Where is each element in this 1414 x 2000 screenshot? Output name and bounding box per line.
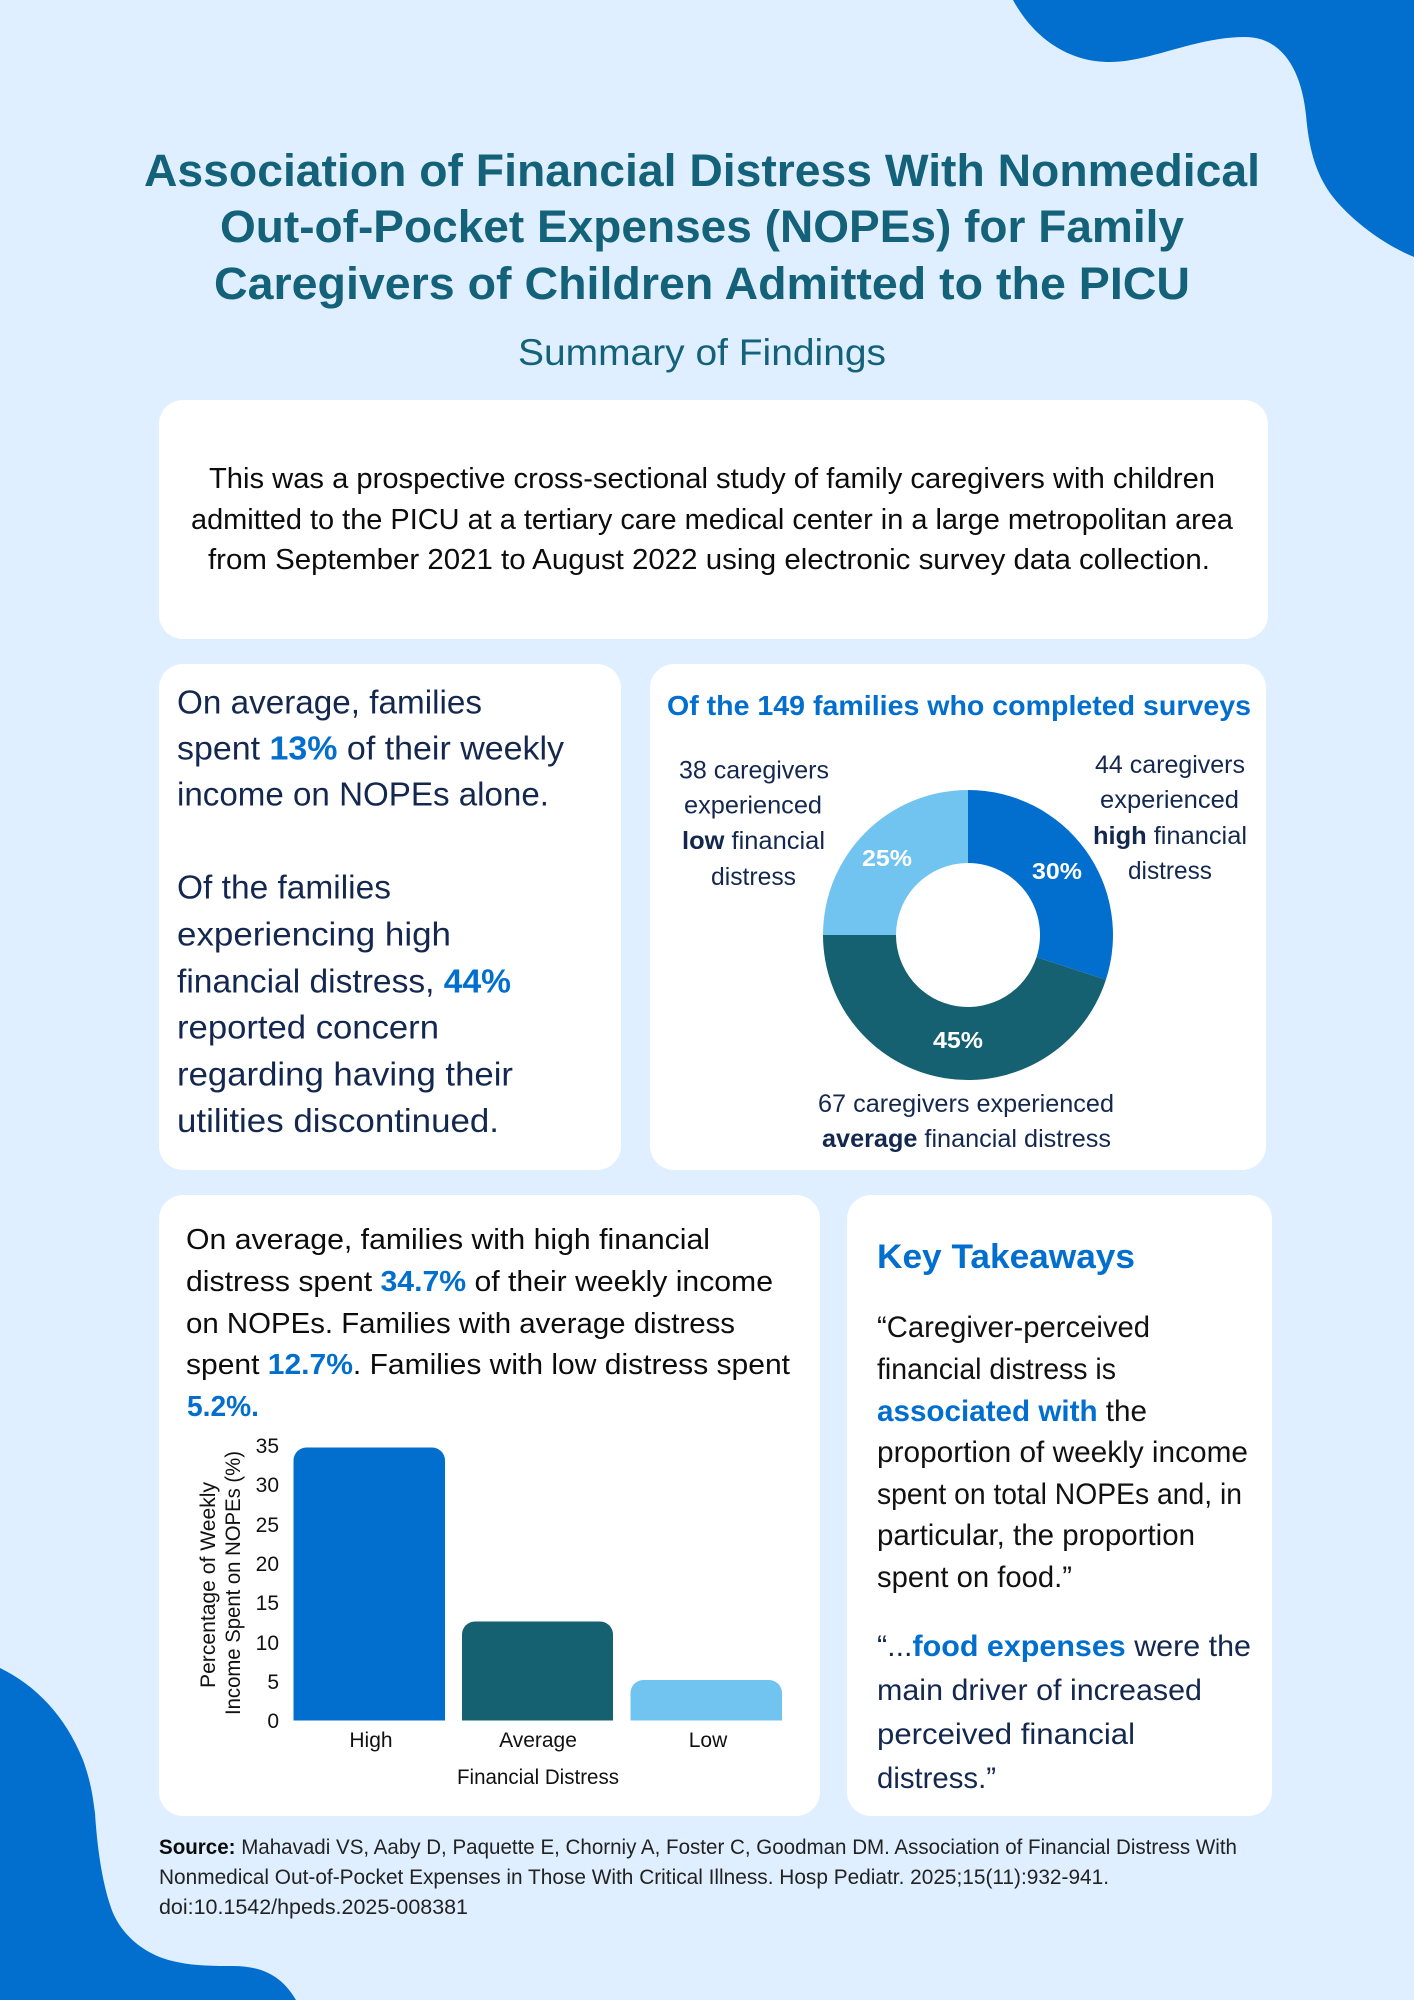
- bar: average 12.7: [462, 1622, 613, 1720]
- x axis title: Financial Distress: [457, 1766, 619, 1789]
- text: utilities concern: reported concern: [177, 1008, 439, 1046]
- text: utilities concern: regarding having their: [177, 1056, 513, 1092]
- key takeaways heading: Key Takeaways: [877, 1238, 1135, 1276]
- quote two: “...food expenses were the: [877, 1630, 1251, 1663]
- source citation: Source: Mahavadi VS, Aaby D, Paquette E, Chorniy A, Foster C, Goodman DM. Association of Financial Distress With: [159, 1836, 1237, 1859]
- study description text: This was a prospective cross-sectional study of family caregivers with children: [209, 463, 1215, 495]
- donut chart: 25%: [862, 845, 912, 871]
- text: spending percentages: [186, 1224, 790, 1423]
- label: low distress: experienced: [684, 792, 822, 820]
- y axis ticks: 15: [256, 1592, 279, 1615]
- y axis ticks: 35: [256, 1435, 279, 1458]
- panel: study description: [159, 400, 1268, 639]
- panel: spending by distress level: [159, 1195, 820, 1816]
- decorative blob: top right: [1013, 0, 1414, 257]
- text: spending percentages: distress spent 34.7% of their weekly income: [186, 1266, 773, 1298]
- text: spending percentages: 5.2%.: [187, 1391, 259, 1423]
- donut chart: 30%: [1032, 858, 1082, 884]
- panel: average spending: [159, 664, 621, 1170]
- x axis categories: High: [349, 1729, 393, 1752]
- label: average distress: average financial distress: [822, 1125, 1111, 1153]
- panel: key takeaways: [847, 1195, 1272, 1816]
- text: utilities concern: experiencing high: [177, 916, 451, 952]
- quote two: [877, 1630, 1251, 1795]
- donut chart: 45%: [933, 1027, 983, 1053]
- title: Association of Financial Distress With Nonmedical: [144, 145, 1260, 196]
- text: spending percentages: On average, families with high financial: [186, 1224, 710, 1256]
- label: high distress: [1093, 751, 1247, 885]
- study description text: admitted to the PICU at a tertiary care medical center in a large metropolitan area: [191, 504, 1234, 536]
- y axis ticks: 5: [267, 1671, 279, 1694]
- text: spending percentages: on NOPEs. Families with average distress: [186, 1308, 735, 1340]
- decorative blob: bottom left: [0, 1668, 296, 2000]
- text: spending percentages: spent 12.7%. Families with low distress spent: [186, 1349, 790, 1381]
- quote one: spent on food.”: [877, 1561, 1072, 1594]
- study description text: from September 2021 to August 2022 using electronic survey data collection.: [208, 544, 1210, 576]
- subtitle: Summary of Findings: [518, 332, 886, 373]
- y axis ticks: 10: [256, 1632, 279, 1655]
- text: utilities concern: utilities discontinued.: [177, 1102, 499, 1139]
- y axis title: Percentage of Weekly: [197, 1482, 220, 1688]
- y axis ticks: 30: [256, 1474, 279, 1497]
- quote one: “Caregiver-perceived: [877, 1311, 1150, 1344]
- text: utilities concern: [177, 868, 513, 1139]
- x axis categories: [349, 1729, 728, 1752]
- quote one: financial distress is: [877, 1353, 1116, 1386]
- quote one: proportion of weekly income: [877, 1436, 1248, 1469]
- label: average distress: [818, 1090, 1114, 1153]
- quote two: perceived financial: [877, 1718, 1135, 1751]
- y axis ticks: [256, 1435, 279, 1733]
- source citation: doi:10.1542/hpeds.2025-008381: [159, 1896, 468, 1919]
- text: weekly income share: income on NOPEs alone.: [177, 776, 549, 812]
- title: [144, 145, 1260, 309]
- y axis title: Income Spent on NOPEs (%): [222, 1451, 245, 1715]
- label: low distress: 38 caregivers: [679, 756, 829, 784]
- y axis ticks: 25: [256, 1514, 279, 1537]
- label: average distress: 67 caregivers experienced: [818, 1090, 1114, 1118]
- label: high distress: distress: [1128, 857, 1212, 885]
- source citation: [159, 1836, 1237, 1919]
- y axis title: [197, 1451, 245, 1715]
- study description text: [191, 463, 1234, 576]
- quote two: distress.”: [877, 1762, 996, 1795]
- quote one: [877, 1311, 1248, 1594]
- source citation: Nonmedical Out-of-Pocket Expenses in Those With Critical Illness. Hosp Pediatr. 2025;15(11):932-941.: [159, 1866, 1109, 1889]
- label: low distress: [679, 756, 829, 891]
- quote one: particular, the proportion: [877, 1519, 1195, 1552]
- quote two: main driver of increased: [877, 1674, 1202, 1707]
- bar: low 5.2: [630, 1680, 782, 1720]
- x axis categories: Low: [689, 1729, 728, 1752]
- bar: high 34.7: [294, 1448, 445, 1720]
- text: weekly income share: [177, 684, 565, 812]
- title: Out-of-Pocket Expenses (NOPEs) for Family: [220, 201, 1184, 252]
- panel heading: Of the 149 families who completed surveys: [667, 690, 1251, 721]
- text: utilities concern: Of the families: [177, 868, 391, 906]
- label: high distress: 44 caregivers: [1095, 751, 1245, 779]
- y axis ticks: 20: [256, 1553, 279, 1576]
- text: utilities concern: financial distress, 44%: [177, 962, 511, 1000]
- title: Caregivers of Children Admitted to the PICU: [214, 258, 1190, 309]
- y axis ticks: 0: [267, 1710, 279, 1733]
- label: low distress: low financial: [682, 827, 825, 855]
- bar chart: [197, 1435, 782, 1789]
- label: high distress: high financial: [1093, 822, 1247, 850]
- text: weekly income share: On average, families: [177, 684, 482, 720]
- label: low distress: distress: [711, 863, 796, 891]
- quote one: spent on total NOPEs and, in: [877, 1478, 1242, 1511]
- panel: financial distress donut: [650, 664, 1266, 1170]
- text: weekly income share: spent 13% of their weekly: [177, 730, 565, 766]
- quote one: associated with the: [877, 1395, 1147, 1428]
- donut chart: [823, 790, 1113, 1080]
- label: high distress: experienced: [1100, 786, 1239, 814]
- x axis categories: Average: [499, 1729, 577, 1752]
